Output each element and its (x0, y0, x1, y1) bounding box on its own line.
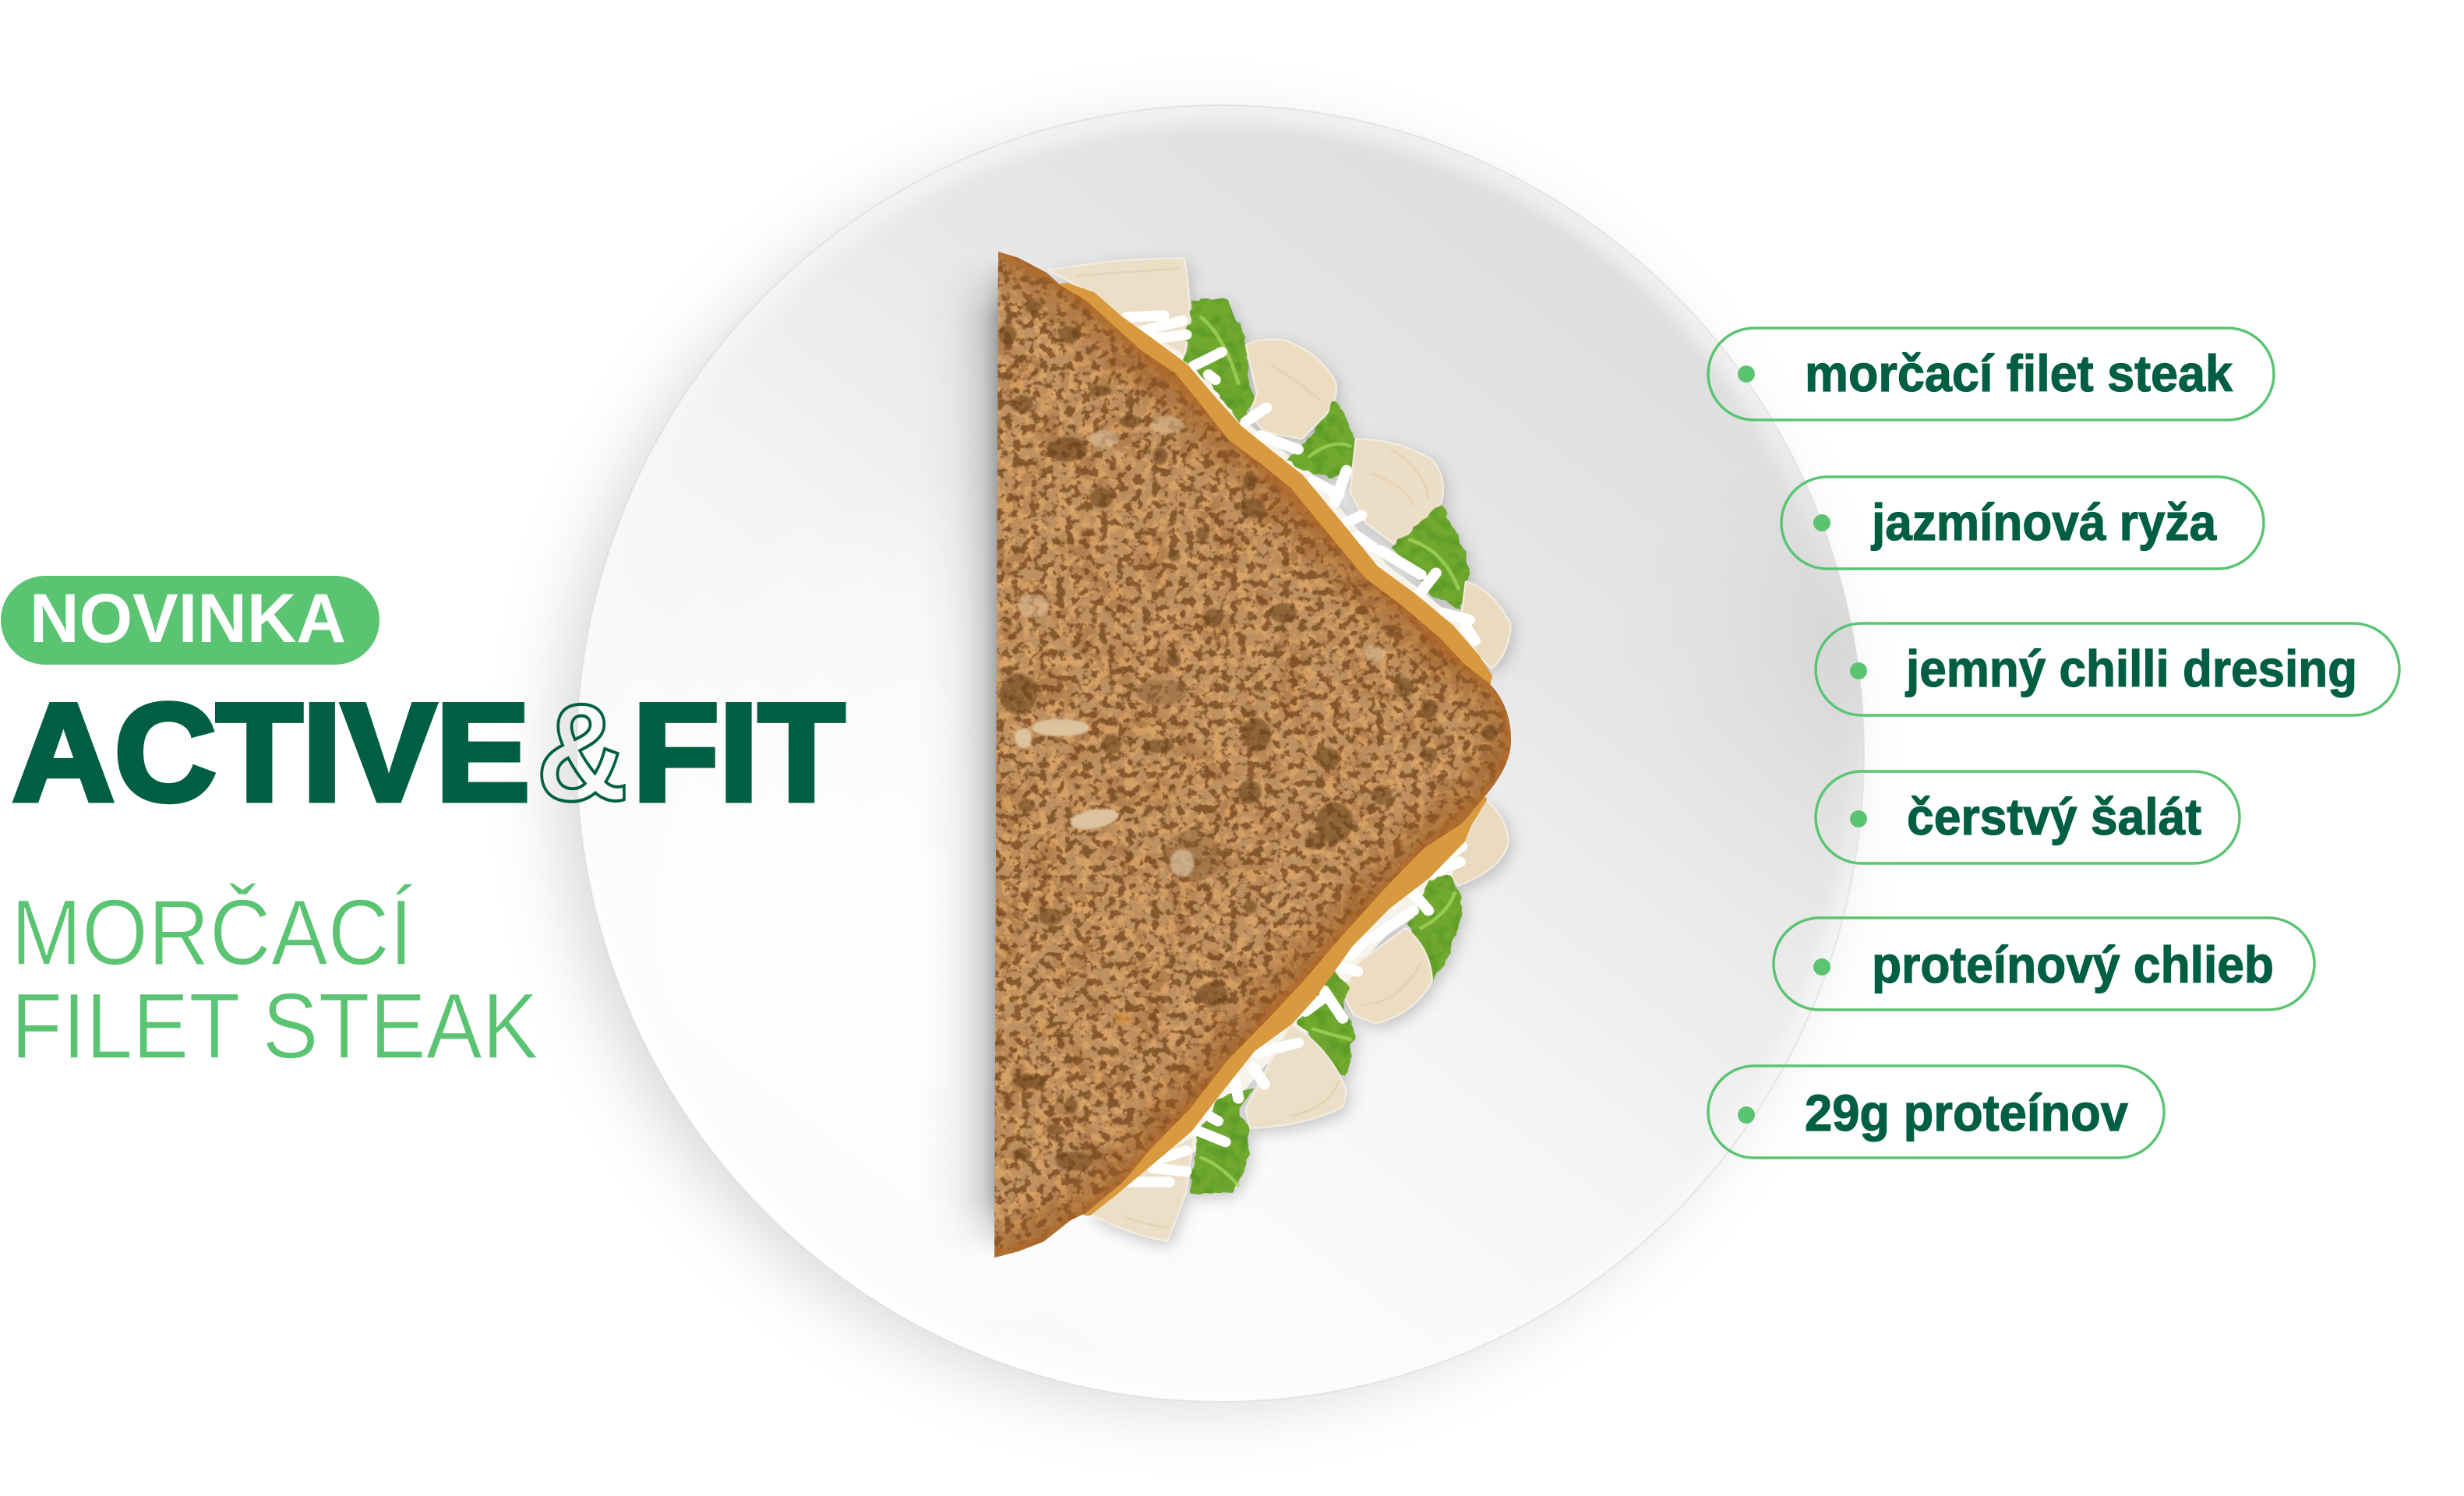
bread crust (994, 252, 1511, 1258)
bread slice (990, 242, 1520, 1262)
label: jazminova ryza (1781, 477, 2264, 569)
label: jemny chilli dresing (1816, 623, 2399, 715)
sandwich (920, 242, 1520, 1262)
label: 29g proteinov (1708, 1066, 2164, 1158)
label: morcaci filet steak (1708, 328, 2274, 420)
bread holes and seeds (1000, 471, 1497, 926)
title: active & fit: FIT (633, 675, 845, 830)
label: proteinovy chlieb: proteínový chlieb (1872, 936, 2274, 993)
upper bread holes (998, 301, 1184, 465)
bottom filling (1089, 799, 1509, 1241)
label: cerstvy salat: čerstvý šalát (1907, 788, 2201, 845)
plate (522, 105, 1864, 1402)
title: active & fit (12, 675, 845, 830)
label: 29g proteinov: 29g proteínov (1805, 1084, 2128, 1141)
subtitle: morcaci filet steak: MORČACÍ (11, 880, 414, 985)
title: active & fit: & (536, 675, 628, 830)
label: jemny chilli dresing: jemný chilli dresing (1904, 640, 2357, 697)
top filling details (1078, 269, 1475, 640)
bottom filling details (1123, 846, 1462, 1227)
title: active & fit: ACTIVE (12, 675, 530, 830)
label: jazminova ryza: jazmínová ryža (1870, 493, 2217, 551)
subtitle: morcaci filet steak: FILET STEAK (11, 974, 538, 1078)
top filling (1049, 258, 1510, 669)
ingredient labels (1708, 328, 2399, 1158)
label: morcaci filet steak: morčací filet steak (1805, 344, 2233, 402)
label: cerstvy salat (1816, 771, 2240, 863)
subtitle: morcaci filet steak (11, 880, 538, 1078)
dressing (1061, 285, 1490, 1213)
sandwich shadow (947, 263, 998, 1251)
badge: novinka: NOVINKA (30, 579, 346, 657)
lower bread holes (1013, 982, 1227, 1171)
label: proteinovy chlieb (1774, 918, 2314, 1010)
